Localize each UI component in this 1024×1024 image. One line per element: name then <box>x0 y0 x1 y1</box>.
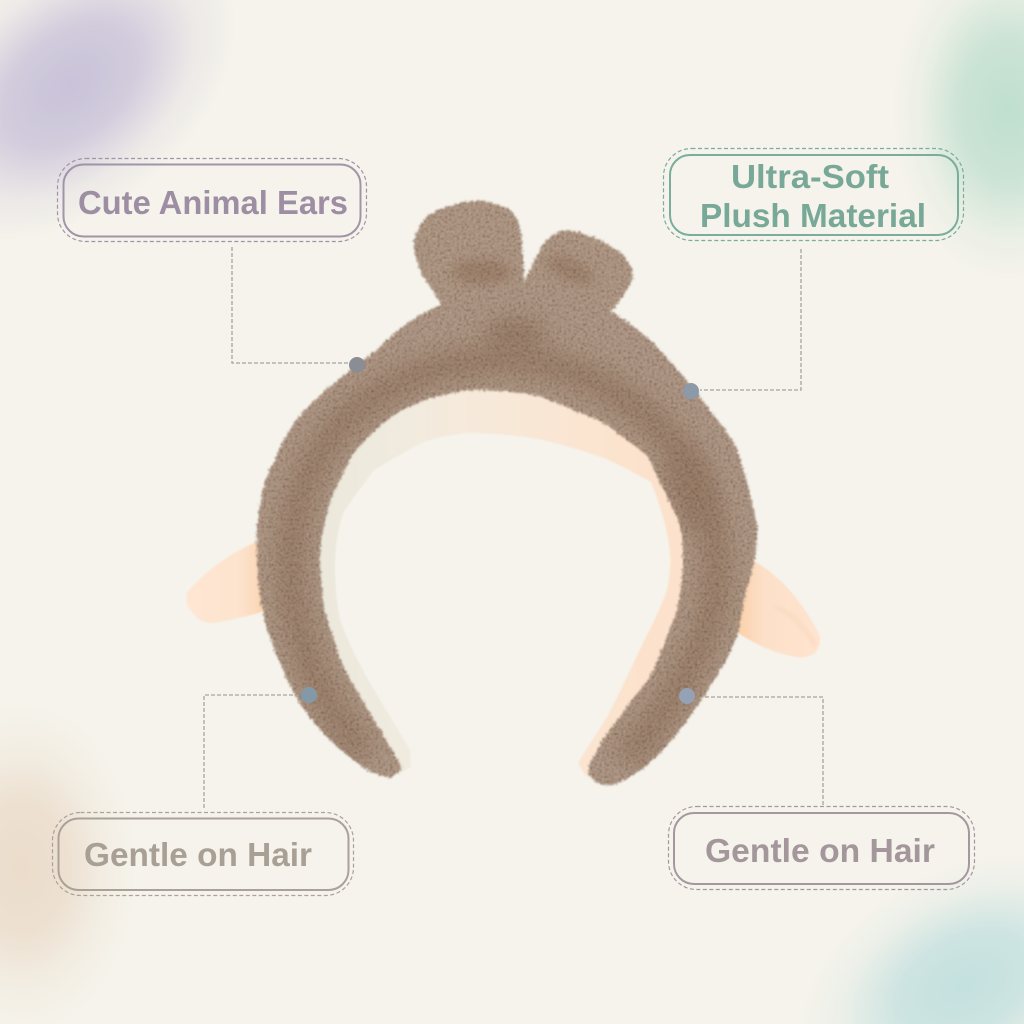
leader line <box>232 247 350 363</box>
fur shading <box>290 319 721 760</box>
callout label: Plush Material <box>700 197 926 234</box>
right side ear <box>734 558 820 657</box>
headband product <box>186 201 820 785</box>
leader line <box>702 697 823 805</box>
leader line <box>204 695 300 808</box>
right ear fold <box>775 606 815 646</box>
callout frame <box>52 812 354 896</box>
background glow: green <box>860 0 1024 320</box>
marker dot <box>679 688 695 704</box>
cream lining <box>296 355 705 779</box>
left bunny ear <box>414 201 526 320</box>
marker dot <box>683 383 699 399</box>
marker dot <box>349 357 365 373</box>
marker dot <box>301 687 317 703</box>
callout: Gentle on Hair left <box>52 687 354 896</box>
callout label: Gentle on Hair <box>705 832 935 869</box>
callout frame <box>58 158 366 242</box>
background glow: purple <box>0 0 300 300</box>
callout frame <box>668 806 974 890</box>
callout label: Ultra-Soft <box>731 158 889 195</box>
callout: Ultra-Soft Plush Material <box>664 148 964 399</box>
callout: Gentle on Hair right <box>668 688 974 890</box>
callout: Cute Animal Ears <box>58 158 366 373</box>
plush band <box>257 287 757 785</box>
background glow: blue-green <box>760 820 1024 1024</box>
right bunny ear <box>510 230 633 330</box>
leader line <box>700 249 801 390</box>
ear shading <box>452 250 598 290</box>
callout frame <box>664 148 964 240</box>
callout label: Gentle on Hair <box>84 836 312 873</box>
background glow: peach <box>0 680 180 1024</box>
left side ear <box>186 540 268 623</box>
callout label: Cute Animal Ears <box>78 184 348 221</box>
